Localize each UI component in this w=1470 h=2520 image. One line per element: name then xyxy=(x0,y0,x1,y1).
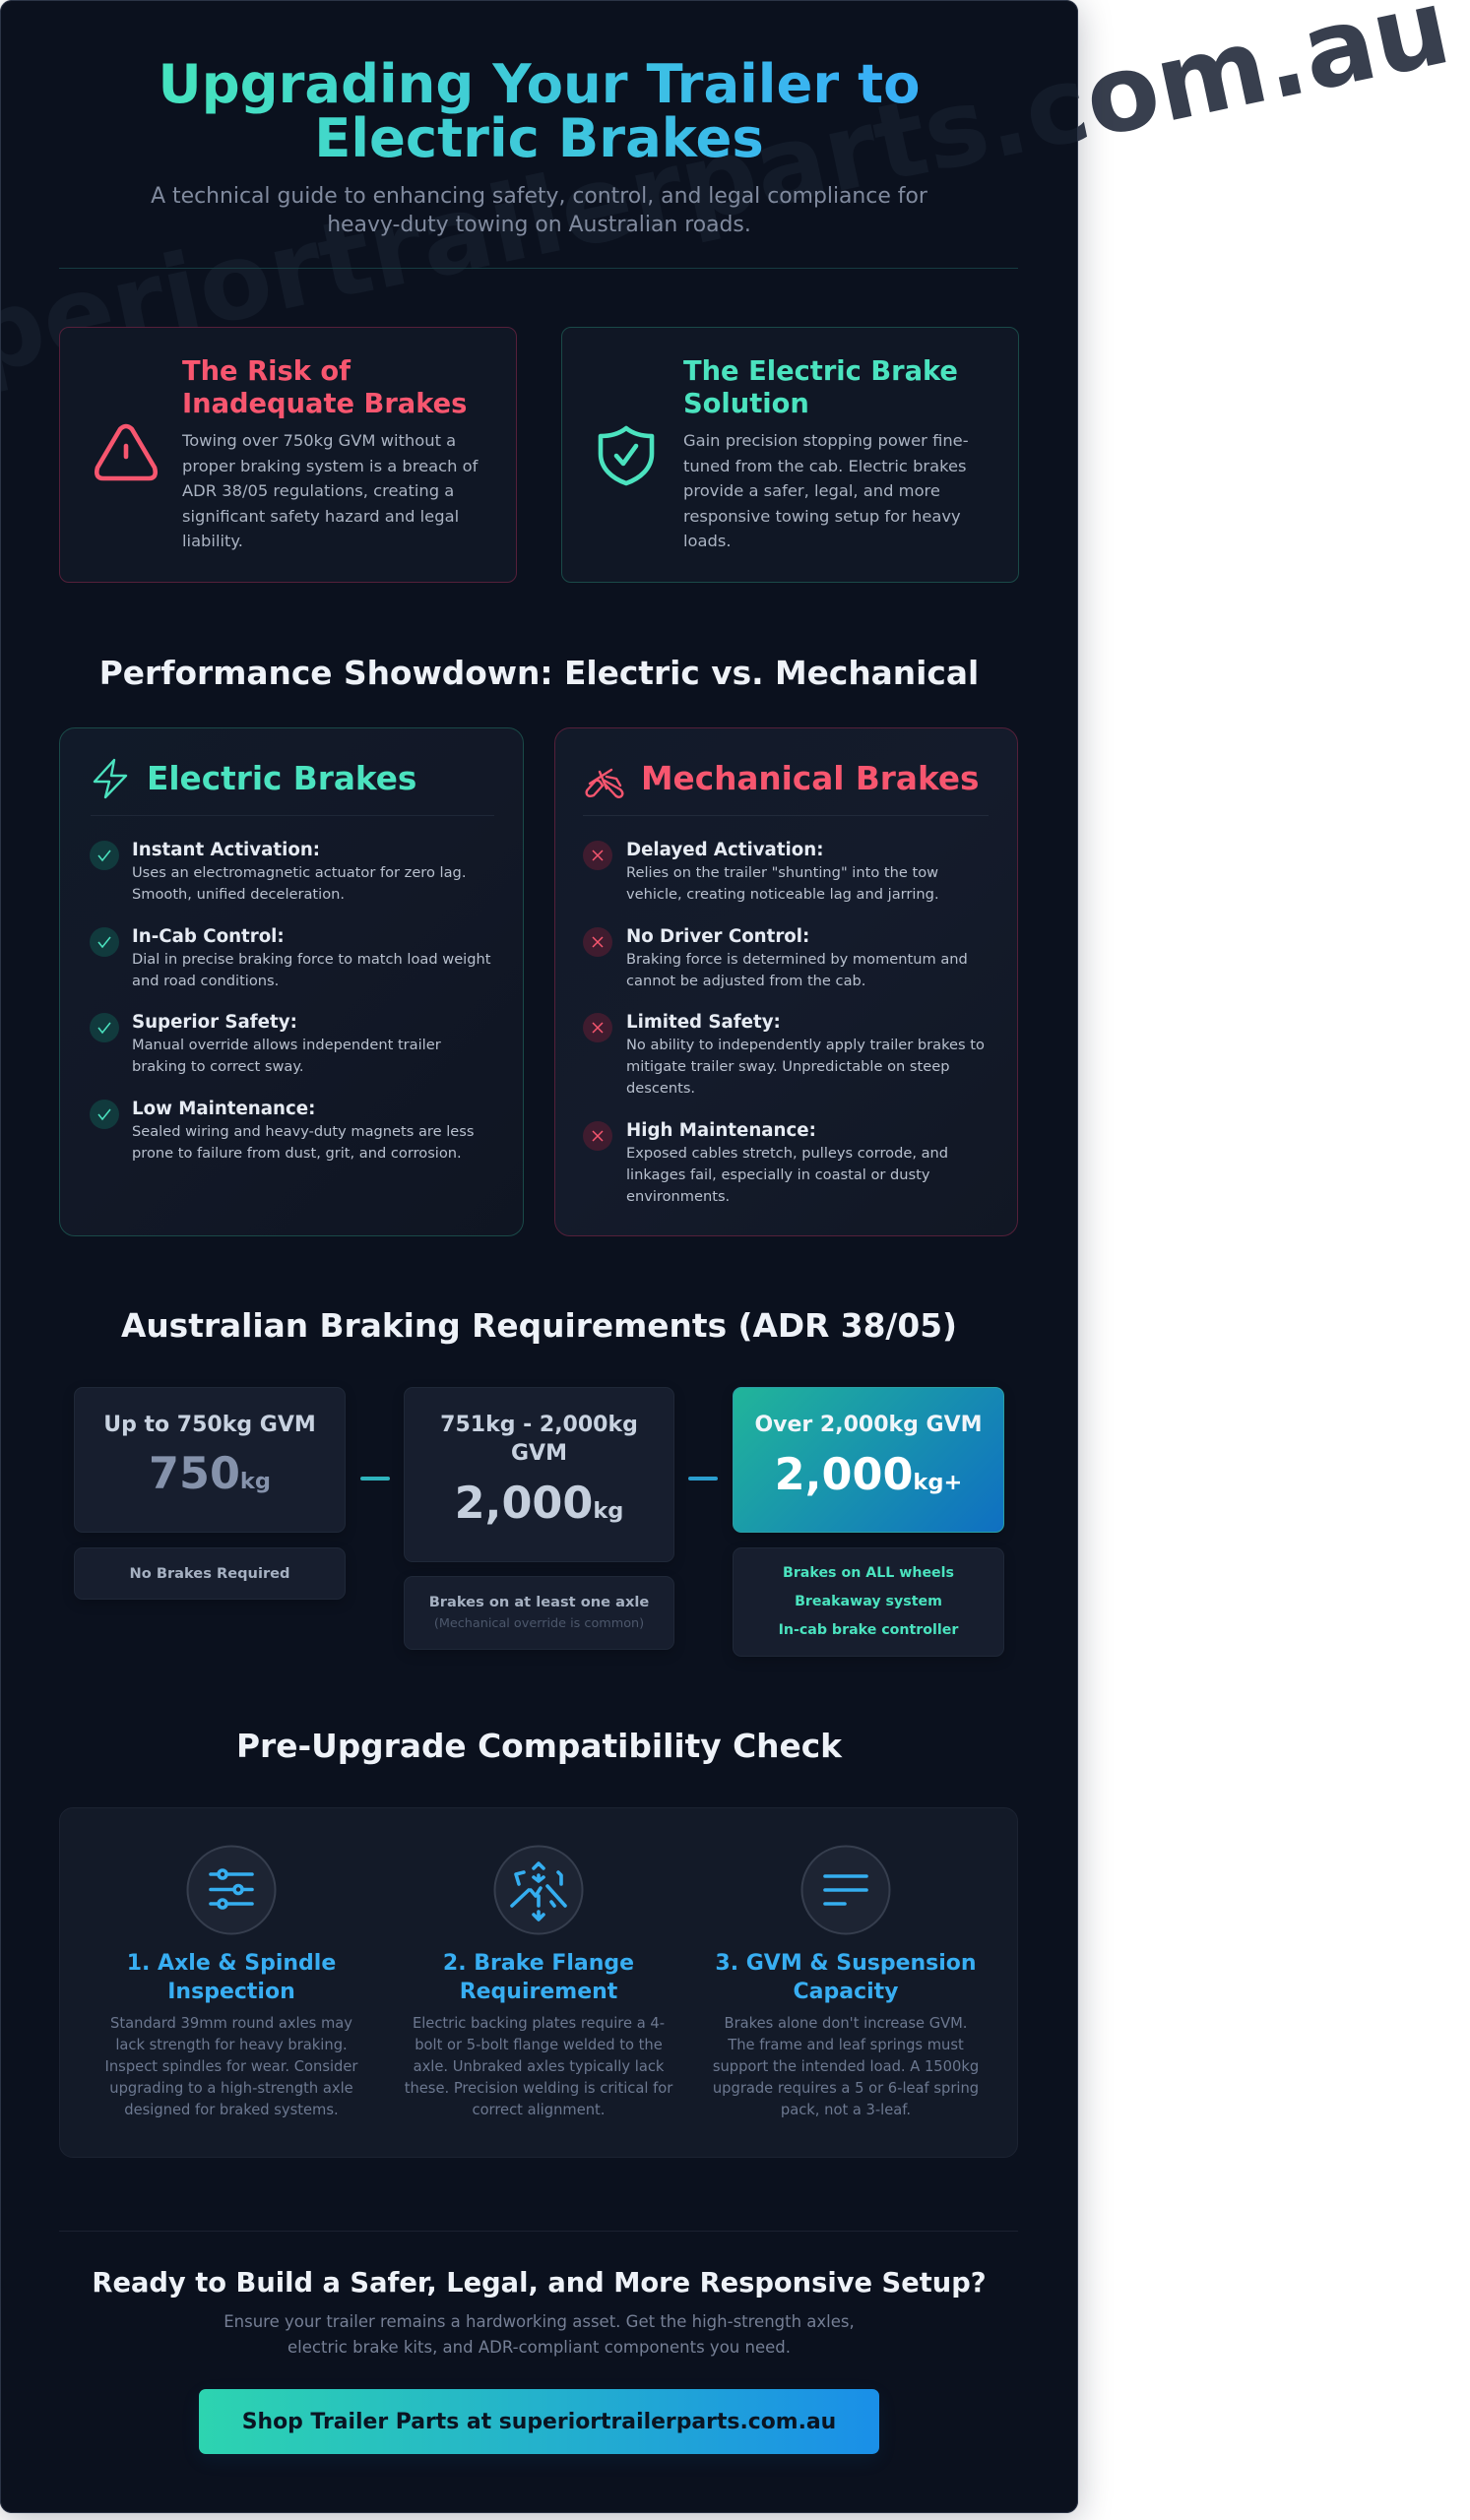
step 1 text: designed for braked systems. xyxy=(124,2102,339,2118)
item description: linkages fail, especially in coastal or dusty xyxy=(626,1166,930,1183)
item text: Low Maintenance: xyxy=(132,1099,315,1119)
step 1 heading xyxy=(75,1950,388,2007)
CTA text: Ensure your trailer remains a hardworking asset. Get the high-strength axles, xyxy=(224,2312,855,2331)
step 1 text: Standard 39mm round axles may xyxy=(110,2015,352,2032)
subtitle xyxy=(151,184,927,237)
item text: Limited Safety: xyxy=(626,1012,781,1033)
step 3 heading: Capacity xyxy=(793,1980,899,2004)
step 1 xyxy=(105,1845,358,2118)
solution text: provide a safer, legal, and more xyxy=(683,481,940,500)
icon: check xyxy=(90,1013,119,1042)
panel: solution xyxy=(561,327,1019,583)
item description: Exposed cables stretch, pulleys corrode, and xyxy=(626,1145,948,1162)
step 3 text: The frame and leaf springs must xyxy=(728,2037,964,2053)
step 3 text: Brakes alone don't increase GVM. xyxy=(725,2015,967,2032)
solution heading: The Electric Brake xyxy=(683,356,958,386)
requirement list: Breakaway system xyxy=(795,1594,942,1609)
icon: check xyxy=(90,1100,119,1129)
requirement text: No Brakes Required xyxy=(130,1565,289,1582)
icon: list lines xyxy=(800,1845,891,1935)
item description: vehicle, creating noticeable lag and jarring. xyxy=(626,886,939,903)
icon: check xyxy=(90,841,119,870)
tier 2 value: 2,000kg xyxy=(455,1479,623,1529)
tier 2 label xyxy=(440,1413,638,1466)
icon: lightning bolt xyxy=(93,758,128,799)
panel: electric brakes xyxy=(59,727,524,1236)
panel: mechanical brakes xyxy=(554,727,1018,1236)
button label: Shop Trailer Parts at superiortrailerparts.com.au xyxy=(242,2410,836,2434)
item description: Braking force is determined by momentum and xyxy=(626,951,968,968)
tier 1 value: 750kg xyxy=(149,1449,271,1499)
item description: Manual override allows independent trailer xyxy=(132,1037,441,1053)
item: superior safety xyxy=(90,1012,441,1075)
item description xyxy=(132,1123,474,1162)
connector dash 1 xyxy=(360,1477,390,1480)
requirement note: (Mechanical override is common) xyxy=(434,1616,644,1631)
item description xyxy=(132,1037,441,1075)
subtitle: A technical guide to enhancing safety, control, and legal compliance for xyxy=(151,184,927,209)
item description: and road conditions. xyxy=(132,973,279,989)
item description: descents. xyxy=(626,1080,695,1097)
item text: No Driver Control: xyxy=(626,926,809,947)
tier 3 value: 2,000kg+ xyxy=(775,1450,962,1500)
item description xyxy=(132,864,466,903)
step 3 text xyxy=(689,2013,1002,2121)
step 2 heading: 2. Brake Flange xyxy=(443,1951,634,1976)
solution heading: Solution xyxy=(683,389,809,419)
item text: High Maintenance: xyxy=(626,1120,816,1141)
item text: In-Cab Control: xyxy=(132,926,285,947)
title xyxy=(0,58,1078,165)
item text: Delayed Activation: xyxy=(626,840,823,860)
CTA button xyxy=(199,2389,879,2454)
item: high maintenance xyxy=(583,1120,948,1205)
step 2 xyxy=(382,1808,697,2143)
step 2 text: these. Precision welding is critical for xyxy=(405,2080,672,2097)
CTA heading: Ready to Build a Safer, Legal, and More Responsive Setup? xyxy=(92,2268,987,2299)
risk text: Towing over 750kg GVM without a xyxy=(182,431,456,450)
icon: sliders xyxy=(187,1845,276,1935)
item description: Sealed wiring and heavy-duty magnets are less xyxy=(132,1123,474,1140)
solution text: tuned from the cab. Electric brakes xyxy=(683,457,967,475)
requirement list: Brakes on ALL wheels xyxy=(783,1565,954,1581)
step 3 text: support the intended load. A 1500kg xyxy=(713,2058,979,2075)
step 1 heading: Inspection xyxy=(167,1980,295,2004)
electric heading: Electric Brakes xyxy=(147,760,416,797)
title: Upgrading Your Trailer to xyxy=(159,53,920,115)
item description xyxy=(626,951,968,989)
mechanical heading: Mechanical Brakes xyxy=(641,760,979,797)
solution text: Gain precision stopping power fine- xyxy=(683,431,969,450)
step 2 text: bolt or 5-bolt flange welded to the xyxy=(415,2037,663,2053)
tier 2 label: GVM xyxy=(511,1441,567,1466)
icon: mechanical linkage xyxy=(585,768,624,798)
tier 1 label: Up to 750kg GVM xyxy=(103,1413,316,1437)
panel: compatibility check xyxy=(59,1807,1018,2158)
title: Electric Brakes xyxy=(314,107,764,169)
risk text: proper braking system is a breach of xyxy=(182,457,478,475)
step 2 text xyxy=(382,2013,695,2121)
solution text: loads. xyxy=(683,532,732,550)
item description xyxy=(626,864,939,903)
main card xyxy=(0,0,1078,2513)
risk text xyxy=(181,431,479,550)
risk text: significant safety hazard and legal xyxy=(182,507,459,526)
item description xyxy=(132,951,490,989)
risk heading: Inadequate Brakes xyxy=(182,389,467,419)
item description: Relies on the trailer "shunting" into the tow xyxy=(626,864,938,881)
step 2 heading: Requirement xyxy=(460,1980,617,2004)
item: delayed activation xyxy=(583,840,939,903)
item description: Smooth, unified deceleration. xyxy=(132,886,345,903)
icon: cross xyxy=(583,1121,612,1151)
step 2 heading xyxy=(382,1950,695,2007)
step 1 text: lack strength for heavy braking. xyxy=(115,2037,348,2053)
step 3 heading: 3. GVM & Suspension xyxy=(715,1951,977,1976)
item description: Dial in precise braking force to match load weight xyxy=(132,951,490,968)
icon: shield check xyxy=(599,425,654,486)
item description: environments. xyxy=(626,1188,730,1205)
tier 3 box xyxy=(733,1387,1004,1533)
risk text: ADR 38/05 regulations, creating a xyxy=(182,481,454,500)
item description: prone to failure from dust, grit, and corrosion. xyxy=(132,1145,462,1162)
CTA text xyxy=(0,2309,1078,2361)
item: no driver control xyxy=(583,926,968,989)
requirement list xyxy=(779,1565,959,1638)
step 3 text: upgrade requires a 5 or 6-leaf spring xyxy=(713,2080,979,2097)
tier 1 box xyxy=(74,1387,346,1533)
step 2 text: Electric backing plates require a 4- xyxy=(413,2015,665,2032)
item: in-cab control xyxy=(90,926,490,989)
item description: No ability to independently apply trailer brakes to xyxy=(626,1037,985,1053)
item description xyxy=(626,1037,985,1097)
tier 2 box xyxy=(404,1387,674,1562)
item description: Uses an electromagnetic actuator for zero lag. xyxy=(132,864,466,881)
item description: cannot be adjusted from the cab. xyxy=(626,973,865,989)
step 1 text: upgrading to a high-strength axle xyxy=(109,2080,353,2097)
solution text: responsive towing setup for heavy xyxy=(683,507,961,526)
heading: Australian requirements: Australian Braking Requirements (ADR 38/05) xyxy=(121,1307,957,1345)
CTA text: electric brake kits, and ADR-compliant components you need. xyxy=(288,2338,791,2357)
requirement list: In-cab brake controller xyxy=(779,1622,958,1638)
icon: warning triangle xyxy=(95,423,158,480)
item description: braking to correct sway. xyxy=(132,1058,304,1075)
tier 3 label: Over 2,000kg GVM xyxy=(754,1413,983,1437)
step 3 text: pack, not a 3-leaf. xyxy=(781,2102,911,2118)
tier 1 requirement xyxy=(74,1547,346,1600)
item: low maintenance xyxy=(90,1099,474,1162)
step 3 heading xyxy=(689,1950,1002,2007)
heading: performance showdown: Performance Showdown: Electric vs. Mechanical xyxy=(99,655,979,692)
solution text xyxy=(683,431,969,550)
heading: compatibility check: Pre-Upgrade Compatibility Check xyxy=(236,1728,842,1765)
icon: brake flange xyxy=(493,1845,584,1935)
step 2 text: correct alignment. xyxy=(473,2102,605,2118)
item: limited safety xyxy=(583,1012,985,1097)
panel: risk xyxy=(59,327,517,583)
step 1 heading: 1. Axle & Spindle xyxy=(127,1951,336,1976)
item text: Instant Activation: xyxy=(132,840,320,860)
subtitle: heavy-duty towing on Australian roads. xyxy=(327,213,751,237)
item description xyxy=(626,1145,948,1205)
step 1 text: Inspect spindles for wear. Consider xyxy=(105,2058,357,2075)
item description: mitigate trailer sway. Unpredictable on steep xyxy=(626,1058,949,1075)
icon: cross xyxy=(583,927,612,957)
risk heading: The Risk of xyxy=(182,356,351,386)
icon: check xyxy=(90,927,119,957)
tier 2 requirement xyxy=(404,1576,674,1650)
item text: Superior Safety: xyxy=(132,1012,297,1033)
risk text: liability. xyxy=(182,532,243,550)
connector dash 2 xyxy=(688,1477,718,1480)
solution heading xyxy=(683,356,958,419)
step 3 xyxy=(689,1808,1004,2143)
risk heading xyxy=(182,356,467,419)
requirement text: Brakes on at least one axle xyxy=(429,1594,649,1610)
item: instant activation xyxy=(90,840,466,903)
icon: cross xyxy=(583,841,612,870)
step 2 text: axle. Unbraked axles typically lack xyxy=(414,2058,664,2075)
icon: cross xyxy=(583,1013,612,1042)
tier 2 label: 751kg - 2,000kg xyxy=(440,1413,638,1437)
tier 3 requirements xyxy=(733,1547,1004,1657)
step 1 text xyxy=(75,2013,388,2121)
